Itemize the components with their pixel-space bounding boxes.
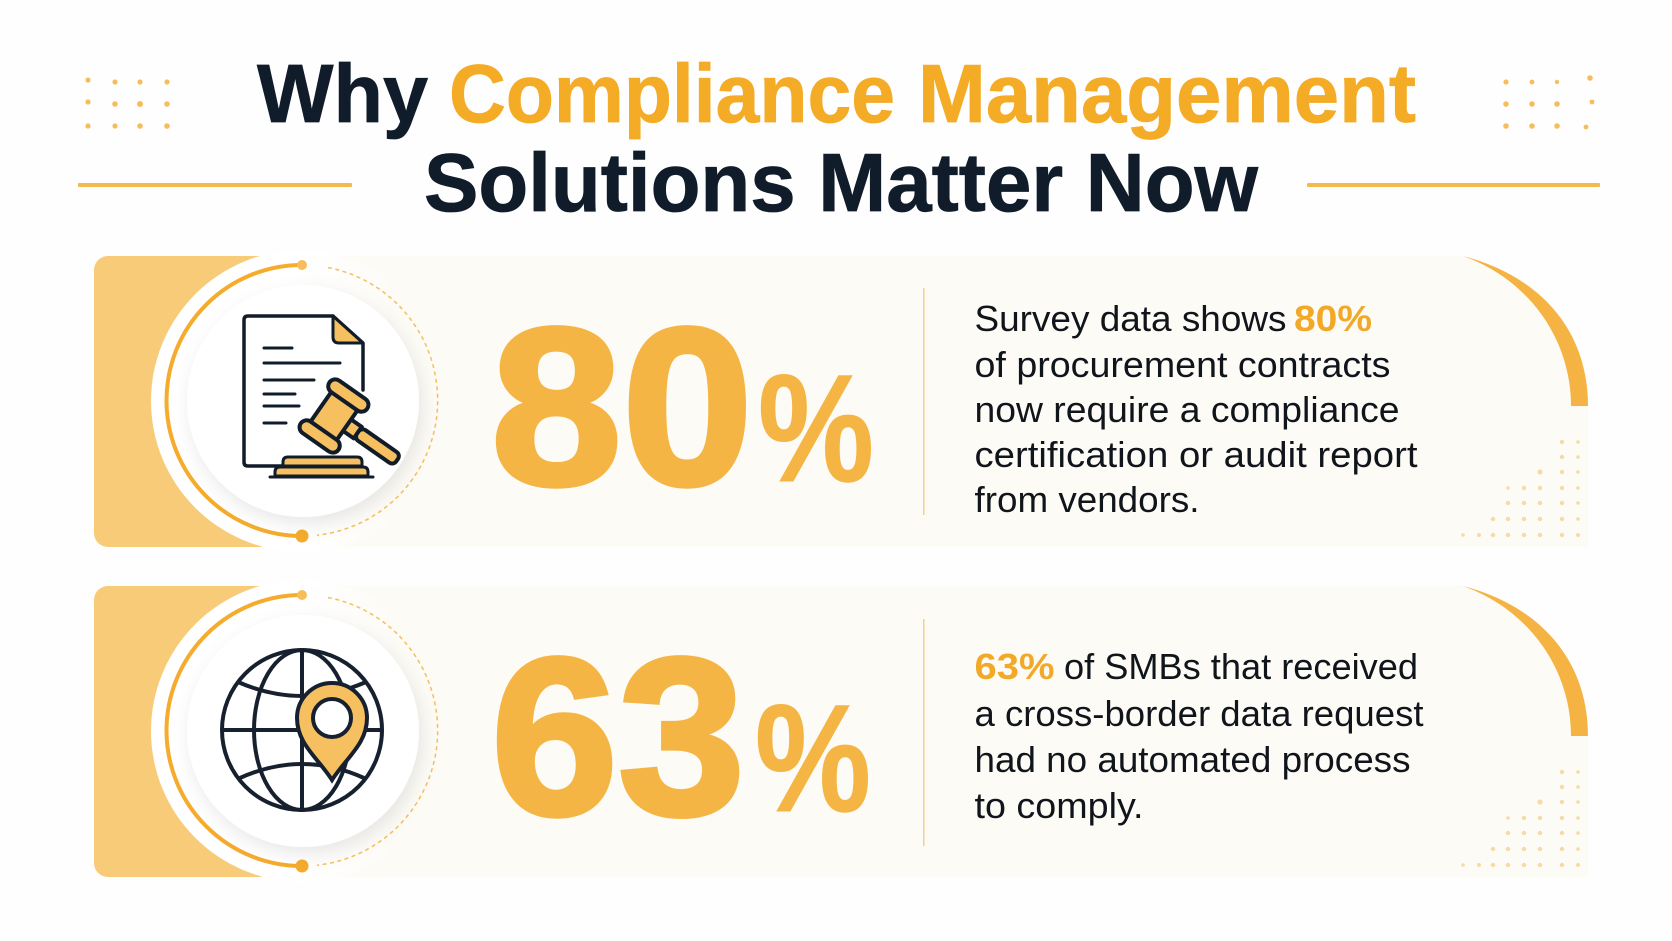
big number 63% (491, 612, 871, 862)
title rule right (1307, 183, 1600, 187)
description text: 80% (1294, 298, 1372, 339)
divider (923, 619, 924, 846)
divider (923, 288, 924, 515)
icon: globe with location pin (222, 650, 382, 810)
icon: document and gavel (244, 316, 415, 486)
panel: 80% statistic (94, 250, 1588, 552)
description text: from vendors. (974, 479, 1200, 520)
faint dot pattern (1461, 770, 1580, 867)
description text: had no automated process (974, 739, 1410, 780)
description text: a cross-border data request (974, 693, 1424, 734)
dot pattern: top right (1503, 75, 1594, 129)
left colour block (94, 586, 274, 877)
title: Compliance (449, 47, 895, 140)
description text: 63% (974, 646, 1054, 687)
faint dot pattern (1461, 440, 1580, 537)
right arc accent (1463, 256, 1588, 406)
panel background (94, 586, 1588, 877)
description text: certification or audit report (974, 434, 1418, 475)
description text: Survey data shows (974, 298, 1286, 339)
description text: now require a compliance (974, 389, 1400, 430)
icon ring (151, 250, 453, 552)
big number 80%: 80 (491, 282, 753, 532)
icon ring (151, 580, 453, 882)
left colour block (94, 256, 274, 547)
title (257, 47, 1416, 229)
panel: 63% statistic (94, 580, 1588, 882)
title: Solutions Matter Now (424, 136, 1258, 229)
description text: of procurement contracts (974, 344, 1390, 385)
panel background (94, 256, 1588, 547)
title: Management (918, 47, 1416, 140)
big number 80% (491, 282, 874, 532)
big number 80%: % (758, 343, 874, 514)
description text (974, 298, 1418, 520)
description text: of SMBs that received (1064, 646, 1418, 687)
description text (974, 646, 1424, 826)
title rule left (78, 183, 352, 187)
title: Why (257, 47, 428, 140)
description text: to comply. (974, 785, 1144, 826)
dot pattern: top left (85, 77, 170, 129)
big number 63%: 63 (491, 612, 745, 862)
big number 63%: % (755, 673, 871, 844)
right arc accent (1463, 586, 1588, 736)
